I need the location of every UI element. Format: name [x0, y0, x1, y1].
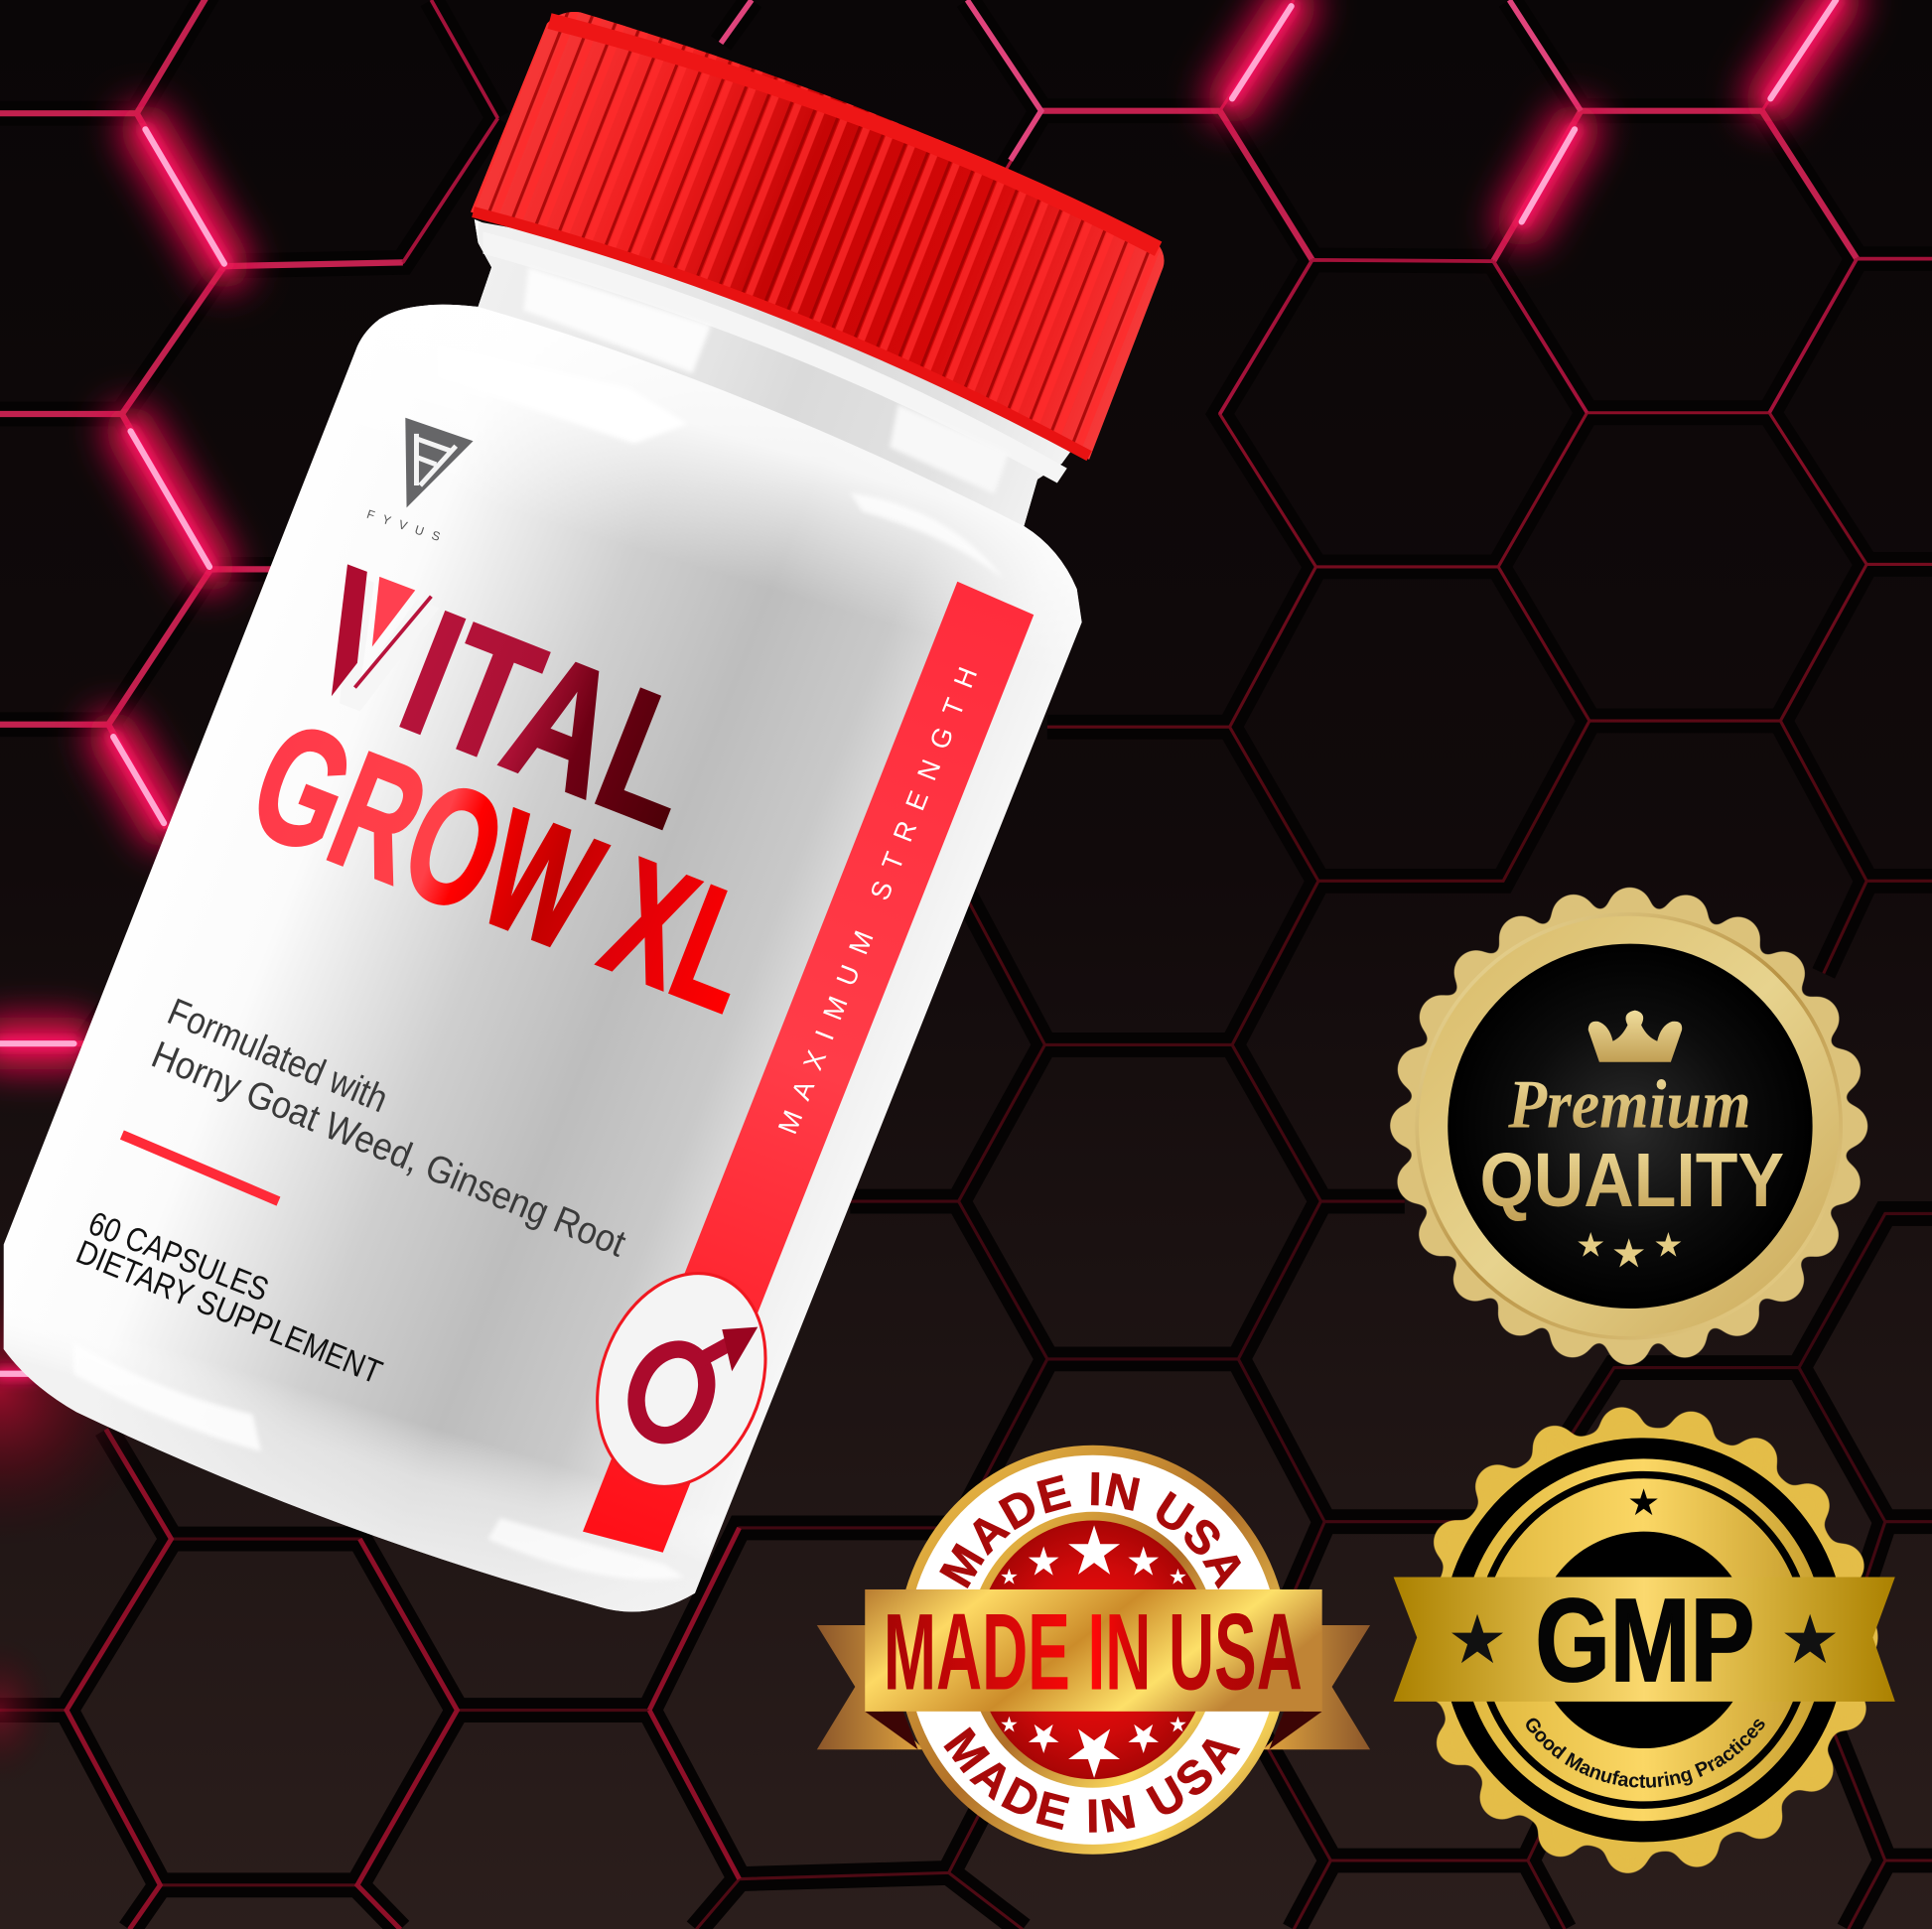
male symbol seal: [569, 1250, 794, 1510]
neon glow accents: [0, 0, 1836, 1374]
lower left red glow: [0, 1238, 160, 1784]
ingredient text: Horny Goat Weed, Ginseng Root: [146, 1033, 631, 1266]
ribbon tails: [817, 1625, 1370, 1749]
product name: GROW XL: GROW XL: [229, 687, 779, 1046]
swallowtail banner: [1394, 1578, 1895, 1702]
capsule count text: DIETARY SUPPLEMENT: [70, 1234, 387, 1392]
seal stars: [1001, 1525, 1186, 1778]
ingredient text: Formulated with: [162, 991, 394, 1121]
gold banner: [865, 1589, 1322, 1712]
background: brighter pink hexagon lines: [0, 0, 1932, 1374]
banner text: MADE IN USA: [884, 1591, 1303, 1713]
badge: premium quality: [1412, 909, 1846, 1343]
top star: [1629, 1488, 1658, 1515]
red ribbed cap: [471, 12, 1165, 460]
red divider: [122, 1135, 278, 1201]
red vertical strip: [583, 582, 1034, 1553]
GMP text: GMP: [1535, 1575, 1754, 1707]
brand logo: FYVUS: [365, 418, 474, 544]
curved text bottom: MADE IN USA: [943, 1726, 1241, 1833]
good manufacturing practices text: Good Manufacturing Practices: [1526, 1718, 1765, 1788]
capsule count text: 60 CAPSULES: [83, 1205, 273, 1309]
brand logo: FYVUS: FYVUS: [365, 507, 442, 544]
round seal: [897, 1446, 1289, 1855]
product name: VITAL: VITAL: [294, 540, 725, 865]
premium script text: Premium: [1507, 1067, 1751, 1144]
bottle body: [4, 219, 1082, 1611]
badge: GMP: [1394, 1407, 1895, 1873]
crown icon: [1588, 1011, 1682, 1062]
quality text: QUALITY: [1480, 1138, 1784, 1223]
product bottle: [4, 12, 1165, 1611]
three stars: [1578, 1232, 1681, 1267]
badge: made in usa: [816, 1446, 1370, 1855]
capsule count text: [70, 1205, 387, 1392]
banner stars: [1451, 1614, 1836, 1663]
strip text: maximum strength: MAXIMUM STRENGTH: [771, 662, 983, 1138]
curved text top: MADE IN USA: [939, 1472, 1241, 1589]
